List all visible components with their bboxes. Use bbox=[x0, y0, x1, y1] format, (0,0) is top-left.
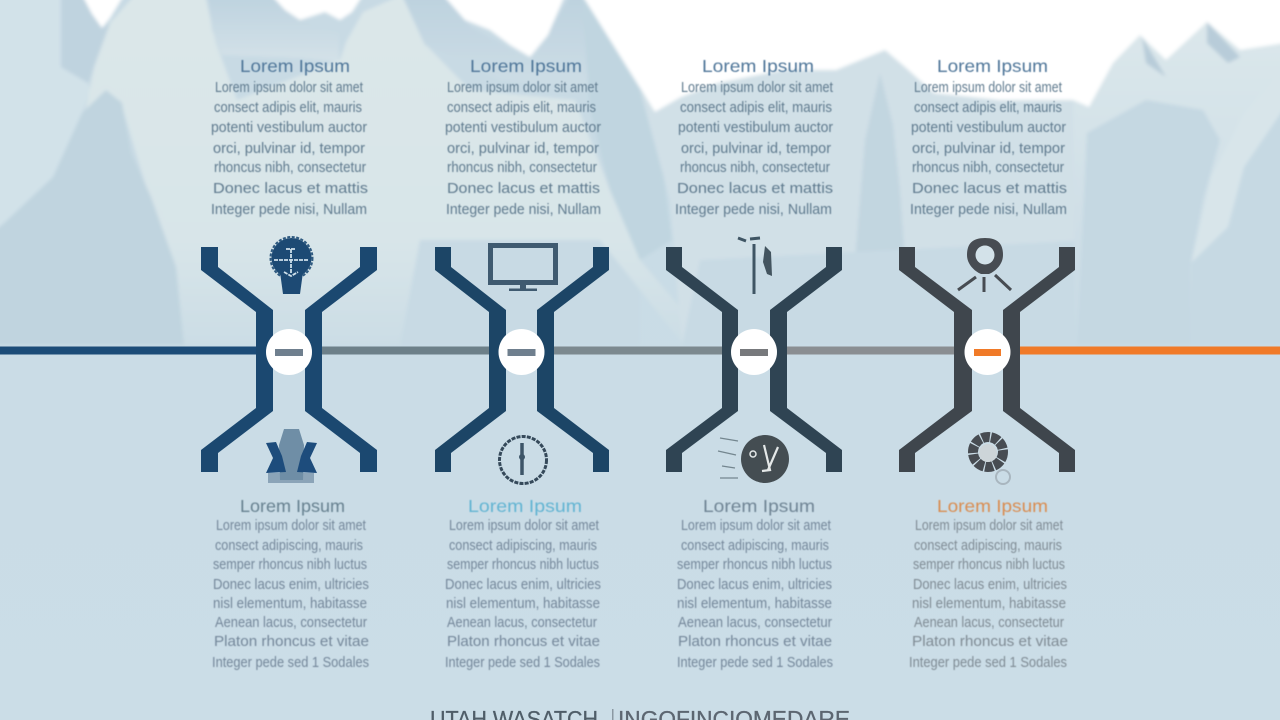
text block: column 4 top: Integer pede nisi, Nullam bbox=[910, 202, 1067, 218]
step 4 bracket and node bbox=[899, 247, 1075, 472]
text block: column 1 top: Integer pede nisi, Nullam bbox=[211, 202, 367, 218]
text block: column 3 top: consect adipis elit, mauris bbox=[680, 100, 832, 116]
text block: column 1 top: consect adipis elit, mauris bbox=[214, 100, 362, 116]
text block: column 2 top: consect adipis elit, mauris bbox=[447, 100, 596, 116]
text block: column 2 top: rhoncus nibh, consectetur bbox=[447, 160, 597, 176]
icon: ring with rays bbox=[958, 238, 1011, 292]
icon: head with crosshair bbox=[270, 237, 312, 294]
text block: column 2 top: Lorem Ipsum bbox=[470, 56, 582, 76]
icon: monitor bbox=[490, 246, 556, 291]
text block: column 1 top: Donec lacus et mattis bbox=[213, 181, 368, 197]
text block: column 1 bottom: nisl elementum, habitasse bbox=[213, 596, 367, 612]
text block: column 2 bottom: nisl elementum, habitasse bbox=[446, 596, 600, 612]
text block: column 3 top: rhoncus nibh, consectetur bbox=[680, 160, 830, 176]
step 2 bracket and node bbox=[435, 247, 609, 472]
text block: column 1 top: Lorem Ipsum bbox=[240, 56, 350, 76]
text block: column 1 top bbox=[211, 56, 368, 218]
text block: column 3 bottom: Lorem Ipsum bbox=[703, 496, 815, 516]
text block: column 4 bottom: Platon rhoncus et vitae bbox=[912, 634, 1068, 650]
icon: climbing tool bbox=[738, 238, 772, 294]
text block: column 4 top bbox=[910, 56, 1067, 218]
text block: column 1 bottom: Integer pede sed 1 Sodales bbox=[212, 655, 369, 671]
sky cut-outs bbox=[82, 0, 124, 28]
text block: column 1 top: Lorem ipsum dolor sit amet bbox=[215, 80, 363, 96]
text block: column 3 top bbox=[675, 56, 833, 218]
text block: column 2 bottom: Integer pede sed 1 Sodales bbox=[445, 655, 600, 671]
text block: column 1 bottom: Lorem ipsum dolor sit amet bbox=[216, 518, 366, 534]
text block: column 3 top: Lorem Ipsum bbox=[702, 56, 814, 76]
text block: column 1 bottom: consect adipiscing, mauris bbox=[215, 538, 363, 554]
text block: column 4 bottom: Aenean lacus, consectetur bbox=[914, 615, 1064, 631]
text block: column 2 bottom: Aenean lacus, consectetur bbox=[447, 615, 597, 631]
text block: column 3 bottom bbox=[677, 496, 833, 671]
text block: column 1 top: rhoncus nibh, consectetur bbox=[214, 160, 366, 176]
timeline line bbox=[0, 346, 1280, 354]
text block: column 4 top: Donec lacus et mattis bbox=[912, 181, 1067, 197]
text block: column 4 bottom: nisl elementum, habitasse bbox=[912, 596, 1066, 612]
text block: column 3 bottom: nisl elementum, habitasse bbox=[677, 596, 832, 612]
text block: column 4 top: consect adipis elit, mauris bbox=[914, 100, 1062, 116]
text block: column 3 top: potenti vestibulum auctor bbox=[678, 120, 833, 136]
text block: column 2 bottom: Platon rhoncus et vitae bbox=[447, 634, 600, 650]
text block: column 3 bottom: Lorem ipsum dolor sit amet bbox=[681, 518, 831, 534]
text block: column 1 bottom: Lorem Ipsum bbox=[240, 496, 345, 516]
text block: column 3 top: Integer pede nisi, Nullam bbox=[675, 202, 832, 218]
text block: column 1 bottom: Donec lacus enim, ultricies bbox=[213, 577, 369, 593]
text block: column 1 bottom: Aenean lacus, consectetur bbox=[215, 615, 367, 631]
text block: column 3 top: orci, pulvinar id, tempor bbox=[681, 141, 831, 157]
text block: column 3 bottom: Aenean lacus, consectetur bbox=[678, 615, 832, 631]
text block: column 2 bottom: Lorem ipsum dolor sit amet bbox=[449, 518, 599, 534]
text block: column 3 bottom: Donec lacus enim, ultricies bbox=[677, 577, 832, 593]
text block: column 2 bottom: semper rhoncus nibh luctus bbox=[447, 557, 599, 573]
text block: column 4 top: rhoncus nibh, consectetur bbox=[912, 160, 1064, 176]
text block: column 3 bottom: Platon rhoncus et vitae bbox=[678, 634, 832, 650]
icon: dark disc with speed lines bbox=[718, 435, 789, 483]
text block: column 3 top: Donec lacus et mattis bbox=[677, 181, 833, 197]
text block: column 2 top bbox=[445, 56, 601, 218]
text block: column 2 bottom: Lorem Ipsum bbox=[468, 496, 582, 516]
text block: column 4 bottom: consect adipiscing, mauris bbox=[914, 538, 1062, 554]
step 3 bracket and node bbox=[666, 247, 842, 472]
text block: column 1 bottom: Platon rhoncus et vitae bbox=[214, 634, 369, 650]
text block: column 3 bottom: semper rhoncus nibh luctus bbox=[677, 557, 832, 573]
text block: column 4 top: potenti vestibulum auctor bbox=[911, 120, 1066, 136]
text block: column 2 bottom: consect adipiscing, mauris bbox=[449, 538, 597, 554]
text block: column 4 top: Lorem ipsum dolor sit amet bbox=[914, 80, 1062, 96]
text block: column 4 bottom: Lorem Ipsum bbox=[937, 496, 1048, 516]
text block: column 4 top: orci, pulvinar id, tempor bbox=[912, 141, 1065, 157]
text block: column 4 top: Lorem Ipsum bbox=[937, 56, 1048, 76]
text block: column 2 top: Donec lacus et mattis bbox=[447, 181, 600, 197]
footer title bbox=[430, 706, 850, 720]
text block: column 3 bottom: consect adipiscing, mauris bbox=[681, 538, 829, 554]
step 1 bracket and node bbox=[201, 247, 377, 472]
text block: column 2 top: orci, pulvinar id, tempor bbox=[447, 141, 599, 157]
text block: column 2 top: Lorem ipsum dolor sit amet bbox=[447, 80, 598, 96]
text block: column 1 top: orci, pulvinar id, tempor bbox=[213, 141, 365, 157]
text block: column 1 bottom: semper rhoncus nibh luctus bbox=[213, 557, 367, 573]
text block: column 3 bottom: Integer pede sed 1 Sodales bbox=[677, 655, 833, 671]
text block: column 2 top: potenti vestibulum auctor bbox=[445, 120, 601, 136]
text block: column 4 bottom: Lorem ipsum dolor sit amet bbox=[915, 518, 1063, 534]
text block: column 2 bottom bbox=[445, 496, 601, 671]
text block: column 4 bottom: Donec lacus enim, ultricies bbox=[913, 577, 1067, 593]
icon: clock dial bbox=[500, 436, 546, 484]
text block: column 3 top: Lorem ipsum dolor sit amet bbox=[681, 80, 833, 96]
icon: seated figure bbox=[266, 429, 317, 483]
text block: column 4 bottom: Integer pede sed 1 Sodales bbox=[909, 655, 1067, 671]
icon: dotted wreath bbox=[973, 437, 1010, 484]
text block: column 1 bottom bbox=[212, 496, 369, 671]
text block: column 4 bottom: semper rhoncus nibh luctus bbox=[913, 557, 1065, 573]
text block: column 1 top: potenti vestibulum auctor bbox=[211, 120, 367, 136]
text block: column 4 bottom bbox=[909, 496, 1068, 671]
text block: column 2 bottom: Donec lacus enim, ultricies bbox=[445, 577, 601, 593]
text block: column 2 top: Integer pede nisi, Nullam bbox=[446, 202, 601, 218]
